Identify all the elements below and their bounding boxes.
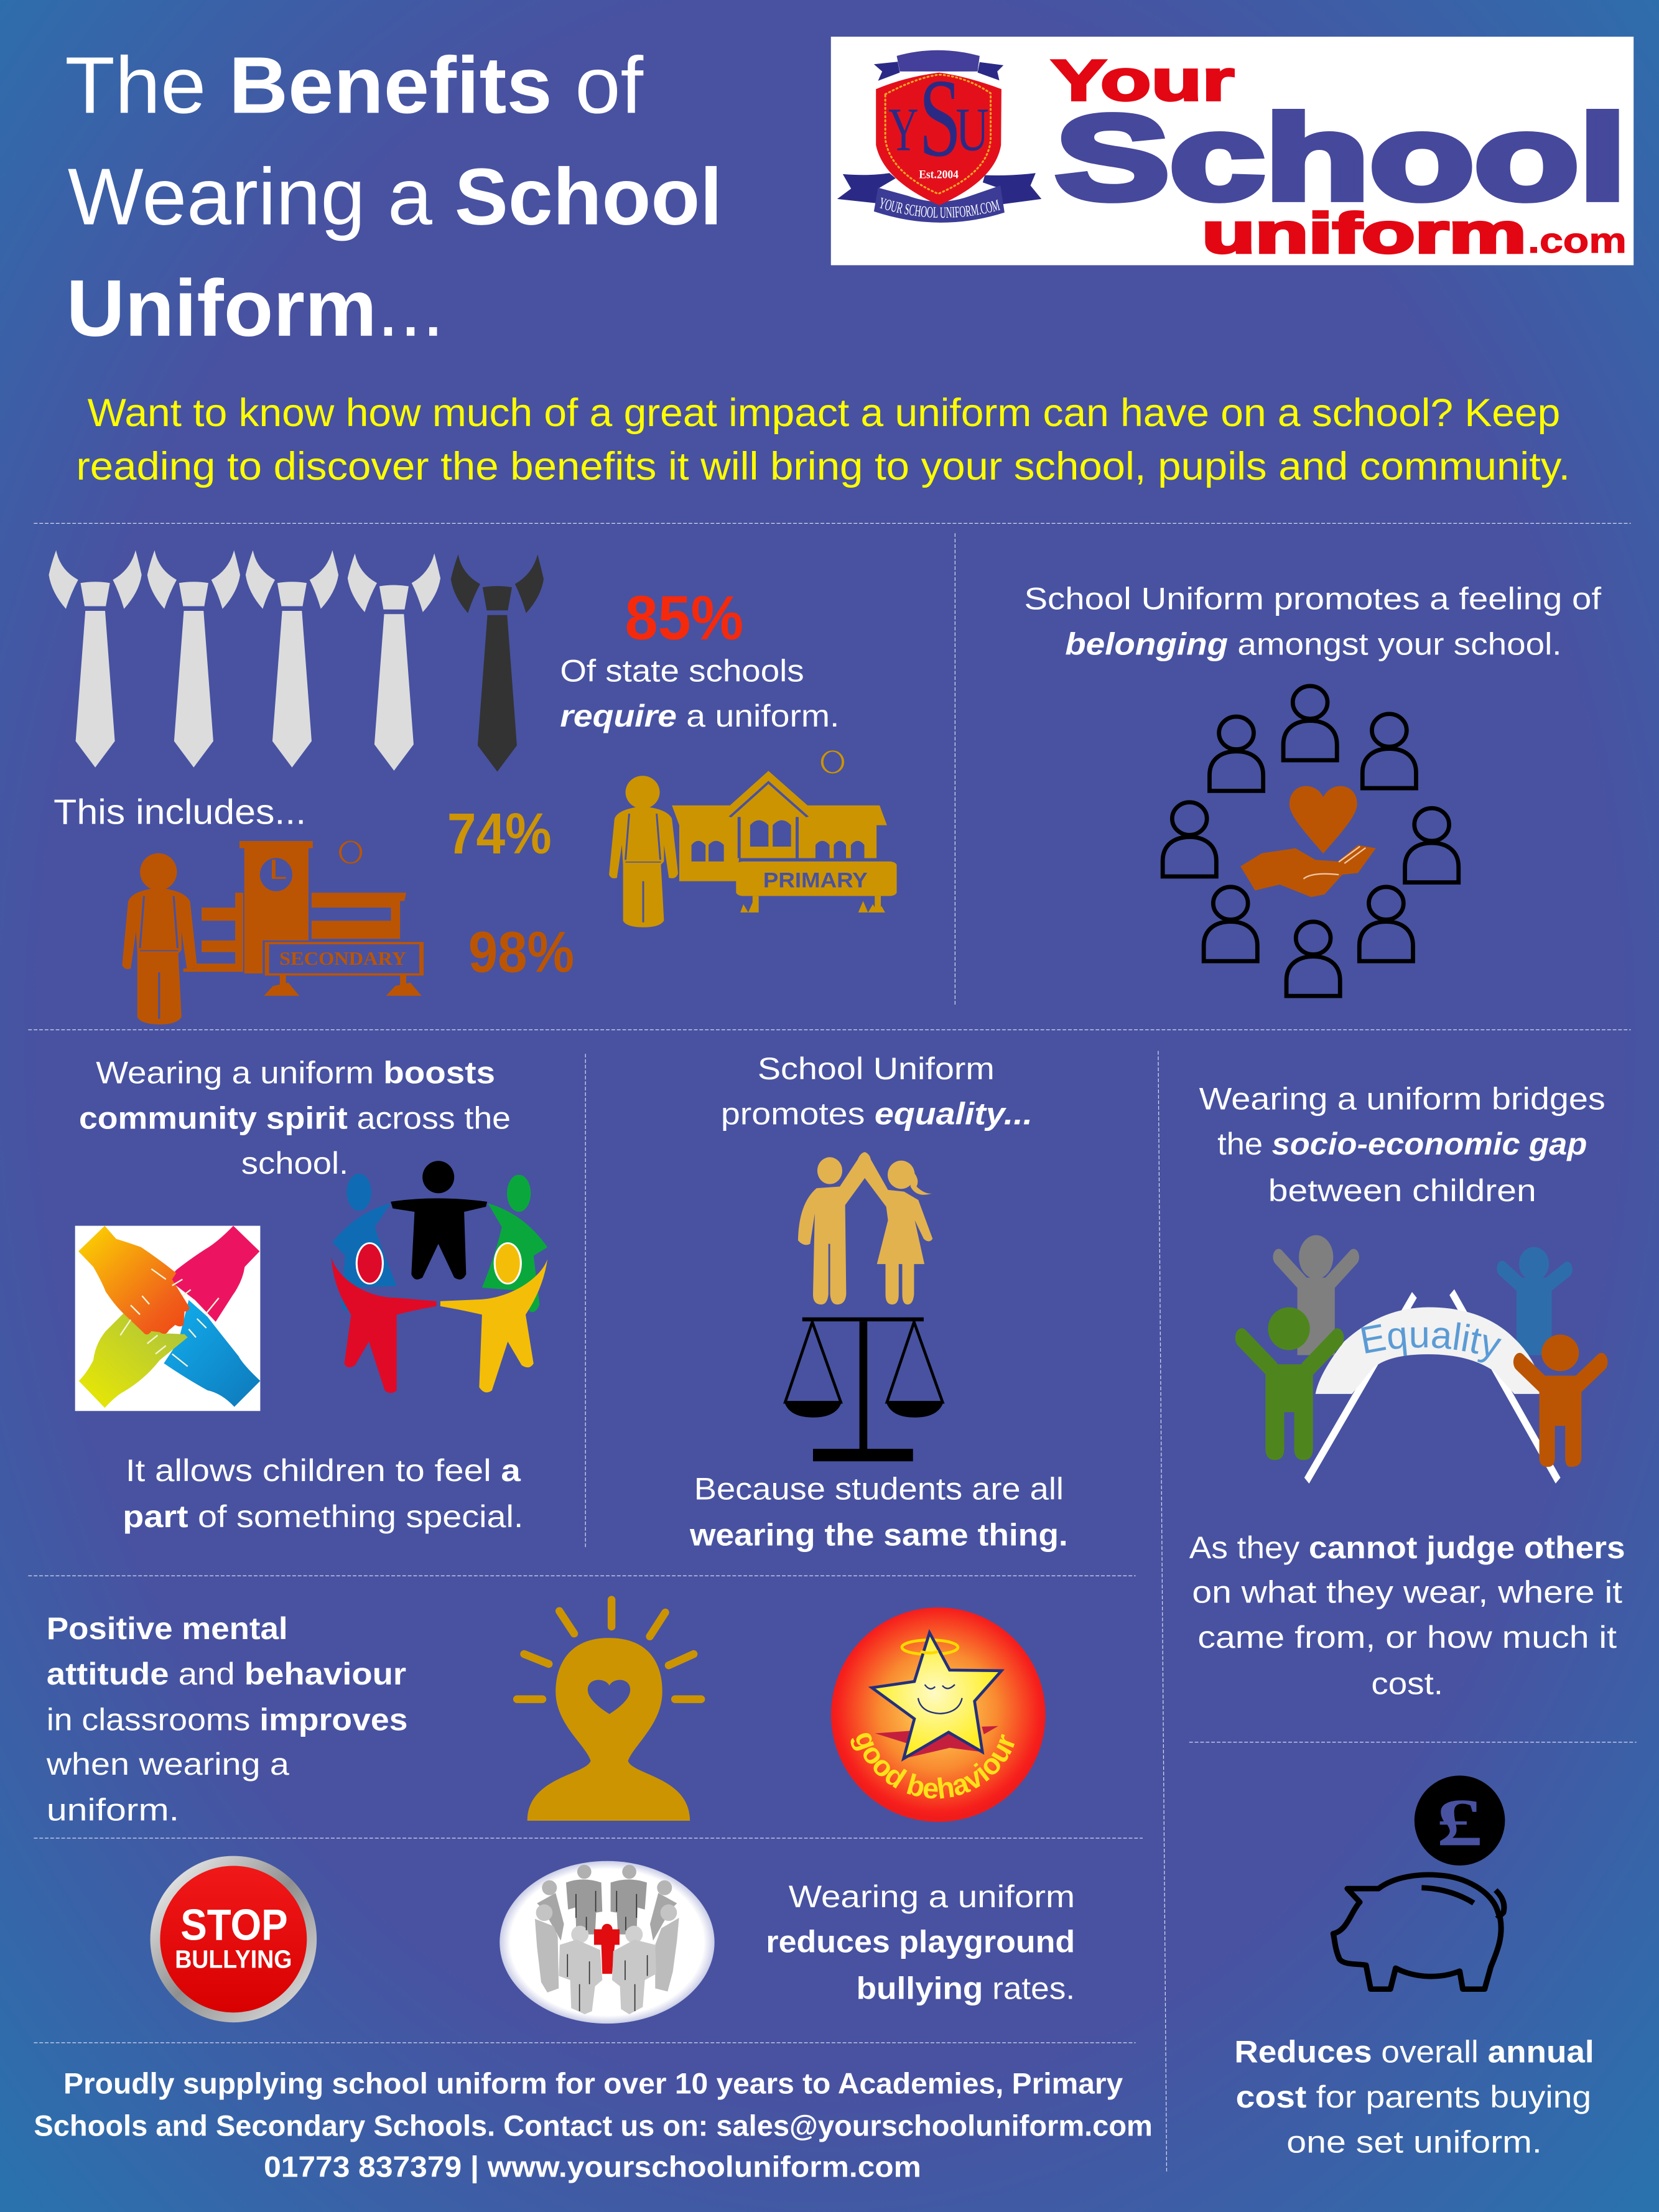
text: bridges the gap: Wearing a uniform bridges [1199,1082,1606,1117]
footer contact text: 01773 837379 | www.yourschooluniform.com [264,2150,921,2183]
intro text: reading to discover the benefits it will bring to your school, pupils and community. [76,445,1570,488]
text: wearing the same thing: Because students are all [694,1472,1064,1507]
icon: secondary school: SECONDARY [279,948,406,969]
logo wordmark: School [1055,90,1627,225]
panel: positive mental attitude [46,1596,1046,1828]
text: wearing the same thing [689,1472,1068,1552]
icon: four coloured hands [75,1226,260,1411]
title: The Benefits of [65,40,644,130]
text: reduces bullying: reduces playground [766,1925,1075,1959]
icon: piggy bank and pound coin: £ [1436,1785,1483,1860]
text: reduces annual cost: Reduces overall annual [1234,2035,1594,2070]
text: reduces bullying: Wearing a uniform [789,1879,1075,1914]
footer contact text: Schools and Secondary Schools. Contact us on: sales@yourschooluniform.com [34,2110,1153,2143]
intro text: Want to know how much of a great impact a uniform can have on a school? Keep [88,391,1560,435]
icon: primary school [609,751,897,927]
logo crest: U [956,95,989,164]
title: Uniform... [67,264,444,353]
icon: figures around red person [500,1861,715,2024]
text: cannot judge others: cost. [1371,1666,1443,1701]
text: promotes equality: School Uniform [758,1051,995,1086]
icon: row of ties [49,550,544,772]
text: reduces annual cost: one set uniform. [1286,2125,1542,2160]
text: cannot judge others: As they cannot judge others [1189,1530,1625,1565]
stat: 74%: 74% [447,801,552,866]
icon: equality bridge with children [1235,1235,1607,1484]
text: positive attitude: uniform. [47,1793,179,1828]
logo crest: YOUR SCHOOL UNIFORM.COM [880,198,1000,218]
panel: reduces bullying [151,1856,1075,2024]
icon: head with heart and rays [517,1600,701,1821]
icon: piggy bank and pound coin [1333,1775,1505,1989]
text: state schools [560,653,839,733]
panel: socio-economic gap [1189,1082,1625,1701]
logo wordmark: uniform [1202,202,1527,265]
text: state schools: Of state schools [560,653,804,688]
text: wearing the same thing: wearing the same thing. [689,1517,1068,1552]
text: reduces annual cost: cost for parents buying [1236,2080,1591,2114]
text: part of something special: It allows children to feel a [126,1453,521,1488]
text: bridges the gap: between children [1268,1173,1536,1208]
stat: 85%: 85% [625,583,743,653]
title [65,40,722,353]
text: promotes equality: promotes equality... [721,1096,1033,1131]
logo crest: Est.2004 [919,169,959,182]
footer contact text: Proudly supplying school uniform for over 10 years to Academies, Primary [63,2068,1123,2101]
text: positive attitude: when wearing a [46,1747,289,1782]
logo crest [837,50,1041,223]
icon: good behaviour badge: good behaviour [851,1733,1015,1799]
text: positive attitude: in classrooms improves [47,1703,407,1737]
text: reduces annual cost [1234,2035,1594,2160]
text: community spirit [79,1056,511,1181]
icon: circle of children [331,1161,547,1393]
icon: boy and girl high five [798,1152,932,1304]
stat: 98%: 98% [468,920,574,985]
text: part of something special: part of something special. [123,1499,523,1534]
panel: belonging [1024,582,1601,996]
icon: primary school: PRIMARY [763,868,868,892]
logo wordmark: Your [1051,48,1234,113]
text: positive attitude: attitude and behaviour [47,1657,406,1691]
text: cannot judge others: on what they wear, where it [1192,1574,1622,1609]
text: reduces bullying [766,1879,1075,2006]
icon: balance scales [784,1317,943,1461]
text: promotes equality [721,1051,1033,1131]
text: cannot judge others [1189,1530,1625,1701]
text: state schools: require a uniform. [560,699,839,733]
text: positive attitude: Positive mental [47,1611,288,1646]
text: positive attitude [46,1611,407,1828]
icon: good behaviour badge [831,1607,1046,1822]
icon: stop bullying button: STOP [180,1900,288,1949]
logo wordmark: .com [1528,221,1627,261]
title: Wearing a School [68,152,722,242]
icon: secondary school [122,841,422,1025]
panel: reduces annual cost [1234,1775,1594,2160]
text: part of something special [123,1453,523,1534]
text: bridges the gap [1199,1082,1606,1208]
logo crest: S [919,56,962,180]
panel: community spirit [75,1056,547,1534]
icon: equality bridge with children: Equality [1361,1322,1502,1362]
text: belonging: belonging amongst your school. [1065,626,1562,661]
icon: heart in hand [1240,786,1376,897]
logo crest: Y [888,95,919,164]
logo wordmark [1051,48,1627,265]
footer contact text [34,2068,1153,2183]
icon: ring of people [1163,686,1459,996]
icon: stop bullying button [151,1856,317,2022]
text: bridges the gap: the socio-economic gap [1217,1127,1587,1161]
intro text [76,391,1570,488]
text: belonging [1024,582,1601,661]
text: community spirit: Wearing a uniform boosts [96,1056,495,1090]
panel: 85% of state schools [49,550,897,1025]
text: cannot judge others: came from, or how much it [1197,1620,1617,1655]
panel: equality [689,1051,1068,1552]
text: community spirit: community spirit across the [79,1100,511,1135]
logo panel [831,36,1633,265]
icon: stop bullying button: BULLYING [175,1945,292,1974]
text: this includes: This includes... [53,792,306,832]
text: community spirit: school. [241,1146,348,1181]
text: reduces bullying: bullying rates. [857,1971,1075,2006]
text: belonging: School Uniform promotes a feeling of [1024,582,1601,616]
